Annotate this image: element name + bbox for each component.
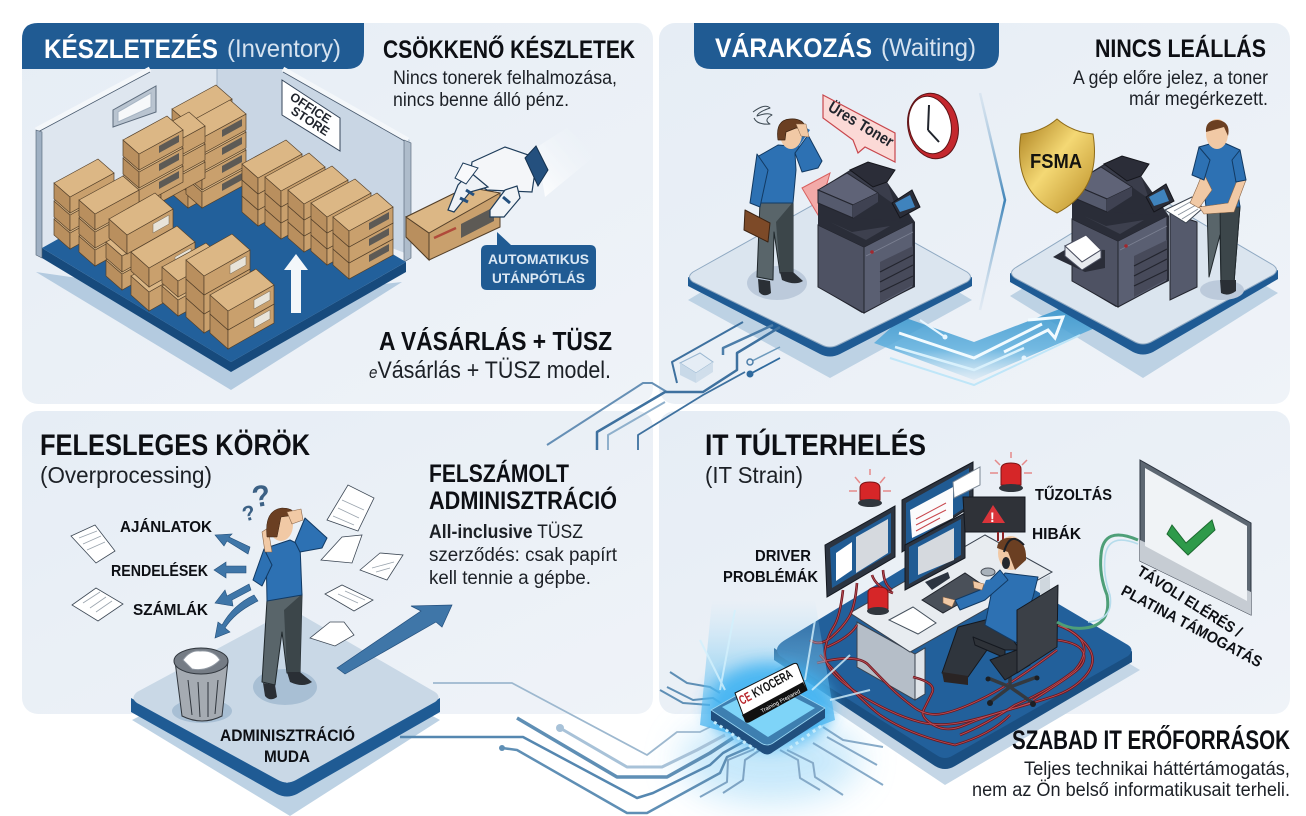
label: offers: AJÁNLATOK	[120, 517, 212, 536]
warning triangle	[802, 173, 830, 215]
technician at chair	[942, 536, 1058, 707]
boxes: front group	[186, 234, 274, 349]
alarm lights	[849, 452, 1032, 615]
warehouse illustration	[36, 69, 411, 390]
monitors: !	[990, 509, 995, 525]
flow arrow between platforms	[874, 305, 1095, 385]
small arrows: paper flows	[214, 534, 258, 638]
floor mat	[774, 540, 1140, 785]
header tab: inventory: (Inventory)	[227, 35, 341, 63]
callout: automatic replenishment: AUTOMATIKUS	[488, 251, 589, 267]
desk	[850, 535, 1052, 700]
sign: office store	[282, 80, 340, 151]
platform: administration muda	[131, 612, 440, 816]
label: administration muda	[220, 726, 355, 766]
text: no toner pile-up	[393, 68, 617, 111]
printer: right	[1053, 156, 1197, 307]
floor arrow	[284, 254, 308, 313]
chip with Kyocera card: Training Prepared	[760, 689, 802, 715]
header tab: waiting	[694, 23, 999, 69]
chip with Kyocera card: KYOCERA	[749, 666, 795, 701]
boxes: right row	[242, 140, 393, 279]
heading: unnecessary rounds: FELESLEGES KÖRÖK	[40, 429, 310, 462]
divider chevron	[980, 93, 1005, 310]
label: invoices: SZÁMLÁK	[133, 600, 208, 619]
label: driver problems: DRIVER	[755, 548, 811, 565]
big monitor with check mark	[1140, 460, 1251, 615]
illustration: IT workstation	[723, 452, 1265, 785]
callout: automatic replenishment	[481, 232, 596, 290]
heading: purchase + service: A VÁSÁRLÁS + TÜSZ	[379, 326, 612, 356]
panel: IT strain	[659, 411, 1290, 714]
icon: trash bin	[172, 648, 232, 723]
boxes: back stacks	[123, 85, 246, 208]
text: all-inclusive contract	[429, 522, 618, 589]
header tab: inventory	[22, 23, 364, 69]
circuit lines: center	[547, 322, 780, 450]
platform: left	[688, 198, 972, 356]
text: purchase model: eVásárlás + TÜSZ model.	[369, 357, 611, 384]
heading: eliminated administration: FELSZÁMOLT	[429, 459, 569, 488]
figure: worried employee	[744, 106, 822, 300]
chip with Kyocera card: CE	[736, 689, 754, 708]
callout: automatic replenishment: UTÁNPÓTLÁS	[492, 269, 585, 286]
soft glow under chip	[680, 718, 860, 802]
robot hand with box	[406, 128, 595, 260]
sign: office store: OFFICE	[287, 90, 333, 126]
vent	[113, 86, 156, 127]
figure: relaxed employee	[1165, 119, 1246, 300]
label: remote access: TÁVOLI ELÉRÉS /	[1134, 563, 1245, 641]
figure: confused employee	[240, 479, 327, 705]
subheading: IT strain: (IT Strain)	[705, 462, 803, 488]
shield: FSMA	[1020, 119, 1094, 213]
circuit lines: bottom	[400, 672, 883, 813]
label: orders: RENDELÉSEK	[111, 561, 208, 580]
text: all-inclusive contract: szerződés: csak papírt	[429, 545, 618, 566]
subheading: overprocessing: (Overprocessing)	[40, 462, 212, 488]
label: administration muda: ADMINISZTRÁCIÓ	[220, 726, 355, 745]
green cable	[1057, 535, 1138, 628]
label: errors: HIBÁK	[1032, 524, 1081, 543]
label: administration muda: MUDA	[264, 748, 310, 766]
panel: inventory	[22, 23, 653, 404]
text: all-inclusive contract: kell tennie a gépbe.	[429, 568, 591, 589]
text: machine signals in advance: már megérkezett.	[1129, 89, 1268, 110]
label: firefighting: TŰZOLTÁS	[1035, 485, 1112, 504]
arrow: up to resolved	[337, 605, 452, 674]
label: remote access: PLATINA TÁMOGATÁS	[1118, 583, 1265, 671]
shield: FSMA: FSMA	[1030, 151, 1082, 173]
text: technical support	[972, 759, 1290, 801]
header tab: waiting: (Waiting)	[881, 34, 976, 62]
boxes: left group	[54, 159, 222, 316]
printer: left	[818, 162, 920, 313]
icon: clock	[902, 89, 964, 163]
platform: right	[1010, 192, 1278, 354]
text: technical support: Teljes technikai háttértámogatás,	[1024, 759, 1290, 780]
heading: eliminated administration: ADMINISZTRÁCIÓ	[429, 485, 617, 515]
figure: confused employee: ?	[240, 501, 258, 527]
chip with Kyocera card	[700, 600, 870, 754]
heading: IT overload: IT TÚLTERHELÉS	[705, 428, 926, 462]
header tab: inventory: KÉSZLETEZÉS	[44, 33, 218, 64]
flying papers	[71, 485, 403, 646]
heading: no downtime: NINCS LEÁLLÁS	[1095, 34, 1266, 63]
speech bubble: empty toner: Üres Toner	[825, 97, 897, 151]
figure: confused employee: ?	[250, 479, 273, 514]
illustration: overprocessing platform and person	[71, 479, 452, 816]
text: no toner pile-up: Nincs tonerek felhalmozása,	[393, 68, 617, 89]
heading: reducing inventory: CSÖKKENŐ KÉSZLETEK	[383, 35, 635, 64]
header tab: waiting: VÁRAKOZÁS	[715, 32, 872, 63]
monitors	[825, 462, 1025, 597]
platform shadows	[688, 215, 1278, 378]
text: machine signals in advance	[1073, 68, 1269, 110]
text: technical support: nem az Ön belső informatikusait terheli.	[972, 780, 1290, 801]
label: driver problems: PROBLÉMÁK	[723, 567, 818, 586]
panel: overprocessing	[22, 411, 653, 714]
icon: faded cube	[680, 353, 713, 383]
text: no toner pile-up: nincs benne álló pénz.	[393, 90, 569, 111]
text: machine signals in advance: A gép előre jelez, a toner	[1073, 68, 1269, 89]
text: all-inclusive contract: All-inclusive TÜSZ	[429, 522, 583, 543]
panel: waiting	[659, 23, 1290, 404]
sign: office store: STORE	[288, 104, 332, 139]
red cables	[810, 570, 1093, 745]
label: driver problems	[723, 548, 818, 586]
heading: eliminated administration	[429, 459, 617, 515]
